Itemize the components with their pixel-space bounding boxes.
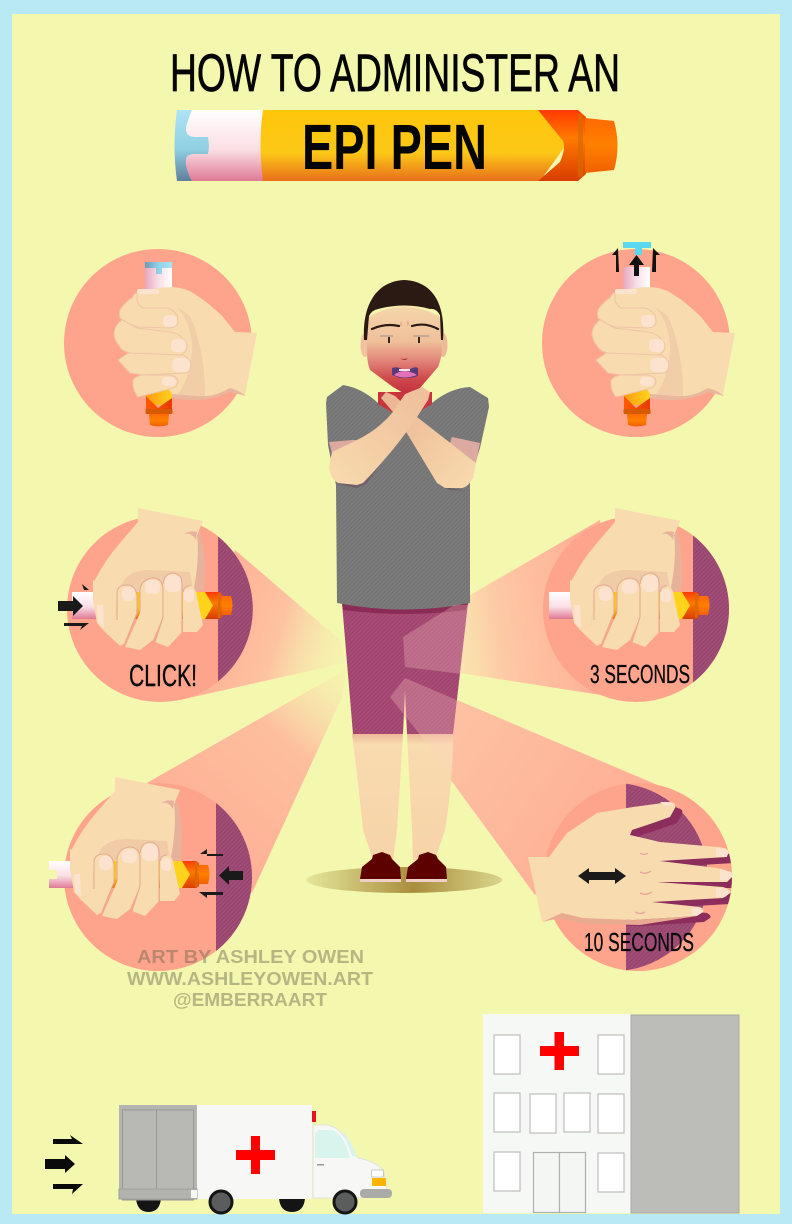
title word: EPI PEN bbox=[302, 111, 487, 183]
hospital bbox=[483, 1014, 739, 1213]
panel: massage for ten seconds bbox=[528, 783, 740, 971]
watermark credit: WWW.ASHLEYOWEN.ART bbox=[127, 969, 373, 989]
title: how to administer an: HOW TO ADMINISTER AN bbox=[170, 44, 620, 103]
arrows left bbox=[199, 849, 243, 898]
bumper bbox=[360, 1189, 392, 1198]
shoes bbox=[360, 852, 447, 882]
eyebrows bbox=[372, 325, 438, 329]
watermark credit: @EMBERRAART bbox=[173, 990, 327, 1010]
beam: lower left panel bbox=[145, 670, 345, 893]
pen horizontal without cap bbox=[49, 861, 210, 888]
label: 3 seconds: 3 SECONDS bbox=[590, 659, 690, 689]
title banner: epi pen bbox=[174, 110, 618, 183]
icon: open hand bbox=[528, 802, 733, 925]
lights bbox=[372, 1170, 384, 1177]
doors bbox=[534, 1152, 586, 1212]
panel: remove safety cap bbox=[542, 242, 735, 437]
label: click: CLICK! bbox=[129, 658, 197, 693]
swollen mouth bbox=[392, 367, 418, 378]
icon: red cross bbox=[540, 1032, 579, 1070]
spotlight beams behind person bbox=[145, 520, 660, 895]
person choking bbox=[326, 280, 489, 882]
cab bbox=[313, 1125, 387, 1198]
beam: ten seconds panel bbox=[390, 678, 660, 895]
frown lines bbox=[401, 321, 408, 326]
neck bbox=[378, 392, 432, 420]
right arm, crossing bbox=[381, 392, 480, 491]
panel: pull out of thigh bbox=[49, 777, 252, 971]
pen vertical with cap bbox=[145, 262, 172, 426]
left arm, crossing bbox=[329, 387, 430, 488]
beam: three seconds panel bbox=[403, 520, 620, 698]
hand shadow bbox=[626, 808, 732, 926]
icon: red cross bbox=[236, 1136, 275, 1174]
icon: removed blue cap bbox=[623, 242, 651, 255]
back wheels bbox=[136, 1198, 305, 1212]
icon: fist bbox=[114, 287, 257, 400]
eyes bbox=[380, 335, 429, 337]
beacon bbox=[312, 1111, 316, 1122]
windscreen bbox=[315, 1130, 350, 1158]
pen vertical without cap bbox=[623, 267, 650, 426]
arrows: ambulance direction bbox=[45, 1135, 83, 1194]
pen horizontal bbox=[72, 592, 232, 619]
beam glow over shorts bbox=[390, 601, 470, 776]
front wheels bbox=[210, 1191, 356, 1213]
door handle bbox=[317, 1164, 324, 1166]
ambulance bbox=[119, 1105, 392, 1213]
shorts waist shadow bbox=[342, 603, 468, 614]
label: 10 seconds: 10 SECONDS bbox=[584, 927, 694, 957]
cargo box bbox=[197, 1105, 312, 1199]
panel: hold three seconds bbox=[543, 508, 729, 702]
shirt bbox=[326, 385, 489, 610]
legs bbox=[352, 734, 453, 860]
nose bbox=[400, 358, 408, 360]
panel: click into thigh bbox=[58, 508, 253, 702]
beam: click panel bbox=[180, 550, 345, 700]
icon: fist bbox=[592, 287, 735, 400]
watermark credit bbox=[127, 947, 373, 1010]
ground shadow under person bbox=[306, 867, 502, 893]
head bbox=[360, 280, 448, 394]
grey rear section bbox=[119, 1105, 197, 1200]
arrows up bbox=[612, 248, 660, 276]
windows bbox=[494, 1035, 624, 1192]
watermark credit: ART BY ASHLEY OWEN bbox=[137, 947, 364, 967]
pen horizontal bbox=[549, 592, 710, 619]
shorts bbox=[342, 603, 468, 734]
panel: gripping pen bbox=[64, 249, 257, 437]
arrow: both ways bbox=[578, 868, 626, 884]
arrows right bbox=[58, 584, 89, 630]
